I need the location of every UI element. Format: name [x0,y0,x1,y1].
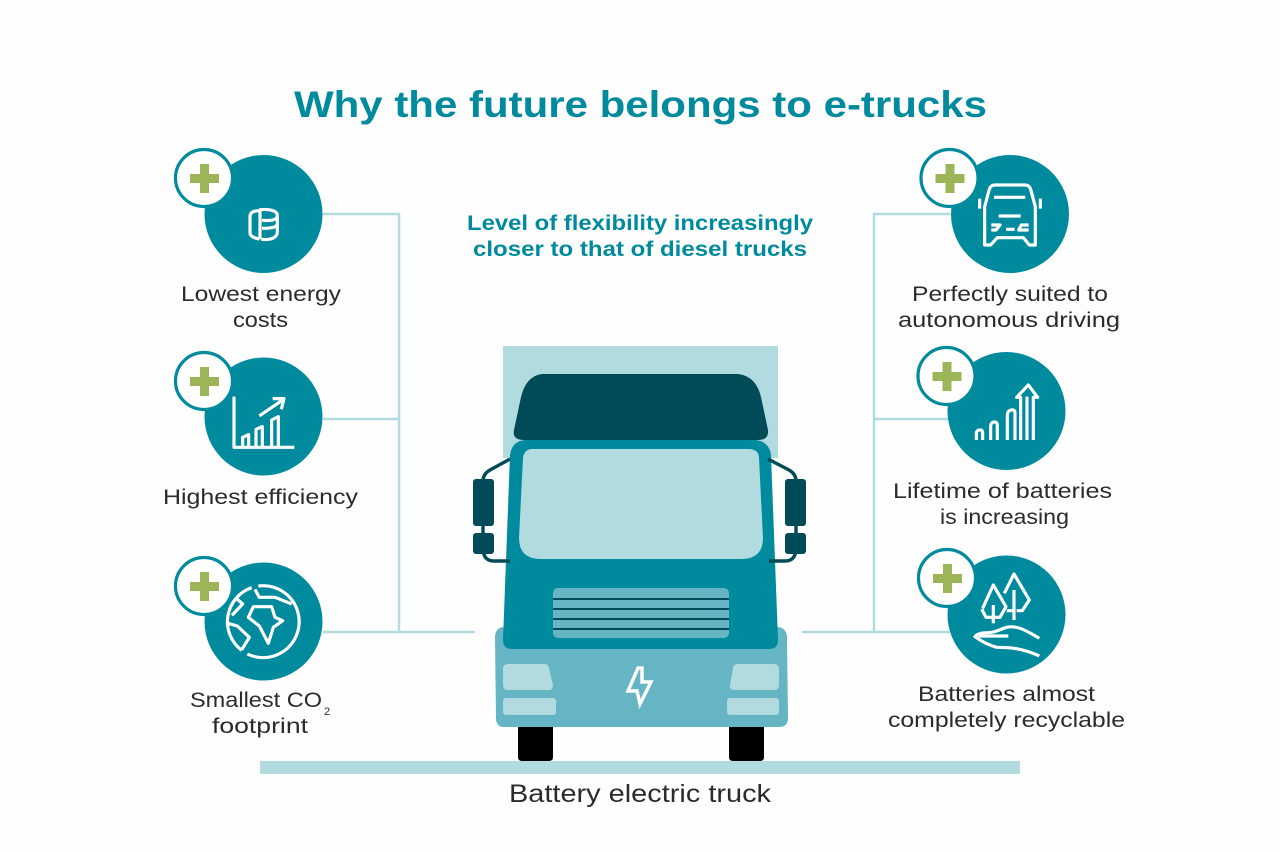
roof fairing [514,374,768,440]
icon: lightning bolt [628,668,651,704]
label [181,283,342,332]
label: Batteries almost [918,683,1095,706]
road [260,761,1020,774]
plus badge [918,550,976,606]
plus badge [918,348,975,404]
label: autonomous driving [898,309,1120,332]
grille [553,588,729,638]
truck illustration [473,346,806,761]
plus badge [176,558,232,614]
label: 2 [324,706,330,718]
cargo box [503,346,778,458]
icon: energy cylinder [250,209,277,240]
label: completely recyclable [888,709,1125,732]
panel: highest efficiency [163,352,359,509]
headlights [503,664,779,715]
icon: truck front [980,185,1040,245]
title: Why the future belongs to e-trucks [294,84,987,125]
icon: rising bars with arrow [976,385,1038,440]
label [190,689,330,738]
right mirror [768,459,806,561]
icon: globe [227,586,299,658]
panel: recyclable batteries [888,550,1125,732]
label: costs [233,309,288,332]
connector lines: left [323,214,475,632]
label [888,683,1125,732]
bumper [495,627,788,727]
icon: rising bar chart [234,397,294,447]
subtitle callout: Level of flexibility increasingly [467,212,813,235]
panel: autonomous driving [898,150,1120,332]
truck caption: Battery electric truck [509,780,772,808]
label: Smallest CO [190,689,322,712]
panel: lifetime of batteries [893,348,1112,529]
cab body [503,440,778,649]
plus badge [921,150,978,206]
connector lines: right [802,214,950,632]
label: Lowest energy [181,283,342,306]
label: Lifetime of batteries [893,480,1112,503]
label [893,480,1112,529]
subtitle callout: closer to that of diesel trucks [473,238,807,261]
label: footprint [212,715,308,738]
label: is increasing [940,506,1069,529]
label [898,283,1120,332]
plus badge [176,352,232,410]
label: Perfectly suited to [912,283,1108,306]
wheels [518,720,764,761]
label: Highest efficiency [163,486,359,509]
panel: smallest CO2 footprint [176,558,330,738]
windscreen [519,449,763,559]
panel: lowest energy costs [176,150,342,332]
plus badge [176,150,232,206]
left mirror [473,459,510,561]
icon: trees on open hand [975,574,1039,656]
subtitle callout [467,212,813,261]
